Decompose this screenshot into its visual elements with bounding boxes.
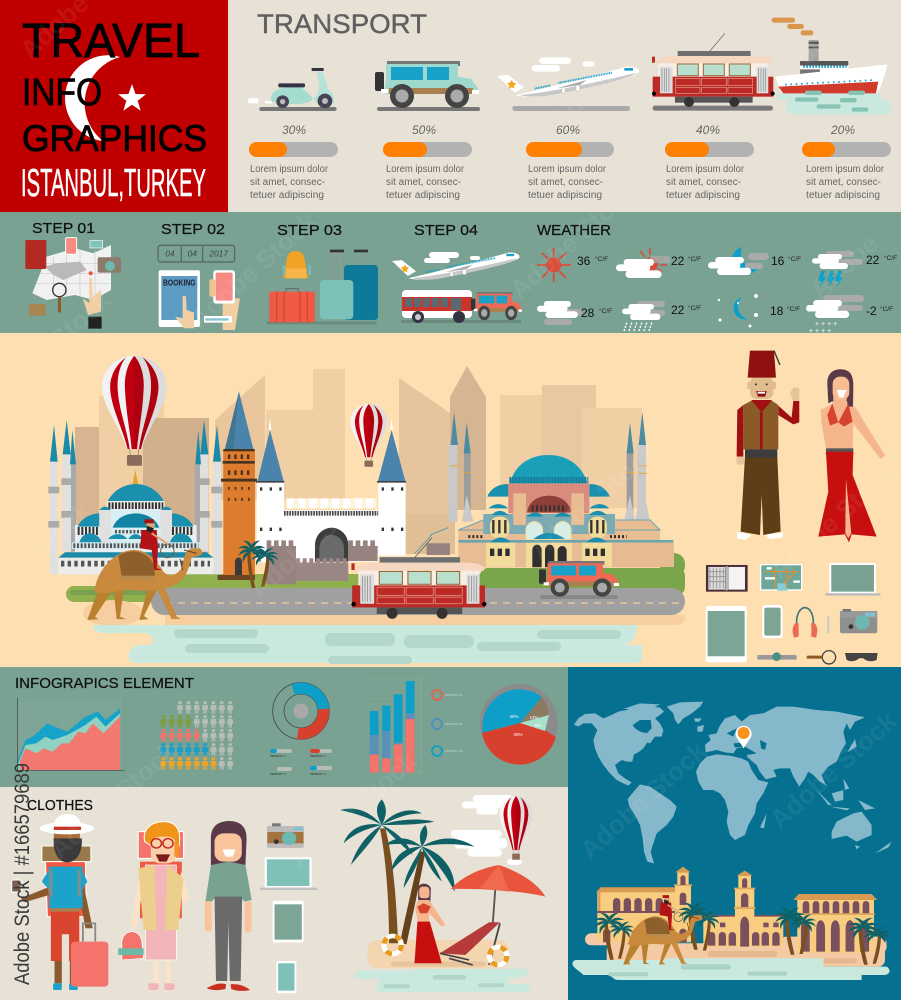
icon: ship	[772, 18, 892, 114]
icon: step 3 luggage	[267, 250, 378, 324]
icon: pen	[827, 616, 829, 633]
icon: snow cloud -2: + + + +	[809, 328, 831, 335]
icon: jeep	[375, 61, 480, 111]
lorem captions: Lorem ipsum dolor	[250, 164, 329, 175]
stock watermarks: Adobe	[764, 18, 844, 94]
icon: rain cloud 22: °C/F	[688, 304, 701, 312]
icon: moon cloud 16	[708, 247, 801, 275]
crescent and star	[65, 55, 146, 141]
donut chart	[273, 683, 329, 739]
icon: camera	[840, 609, 877, 633]
lorem captions: sit amet, consec-	[250, 177, 325, 188]
product ring legend: PRODUCT 01	[445, 693, 463, 697]
city silhouette	[75, 366, 642, 557]
figure: bearded traveller	[12, 814, 108, 990]
stock watermarks: Stock	[24, 494, 97, 564]
panel: transport	[248, 9, 892, 201]
pictogram chart	[160, 701, 233, 770]
figure: woman in green top	[205, 821, 252, 991]
panel: infographic elements	[15, 675, 558, 776]
lorem captions: tetuer adipiscing	[806, 190, 880, 201]
icon: sun 36: °C/F	[595, 255, 608, 263]
beach scene	[340, 795, 545, 992]
stat: 60 percent	[526, 123, 614, 157]
icon: snow cloud -2: -2	[866, 304, 877, 318]
lorem captions: sit amet, consec-	[528, 177, 603, 188]
stat: 60 percent: 60%	[556, 123, 580, 137]
icon: tram	[652, 33, 775, 111]
landmark: blue mosque	[48, 420, 222, 574]
lorem captions: tetuer adipiscing	[528, 190, 602, 201]
icon: rain cloud 22: 22	[671, 303, 685, 317]
icon: step 2 booking: 2017	[208, 249, 228, 259]
panel: world map	[568, 667, 901, 1000]
stat: 50 percent	[383, 123, 472, 157]
icon: cloud 28	[537, 301, 612, 325]
pie chart: 40%	[509, 714, 519, 719]
lorem captions: tetuer adipiscing	[250, 190, 324, 201]
icon: rain cloud 22	[622, 301, 701, 331]
stat: 20 percent	[802, 123, 891, 157]
stock watermarks: Adobe Stock	[544, 5, 683, 134]
icon: headphones	[793, 608, 817, 638]
icon: night moon 18: 18	[770, 304, 784, 318]
stat: 30 percent	[249, 123, 338, 157]
stock watermarks: Adobe	[804, 228, 884, 304]
lorem captions: Lorem ipsum dolor	[528, 164, 607, 175]
icon: step 2 booking: 04	[188, 249, 197, 259]
stat: 20 percent: 20%	[830, 123, 855, 137]
lorem captions: Lorem ipsum dolor	[806, 164, 885, 175]
panel: title	[0, 0, 228, 212]
pie chart: 8%	[535, 723, 541, 728]
stock watermarks: Adobe Stock	[284, 745, 423, 874]
icon: step 2 booking	[158, 245, 240, 330]
stat: 40 percent: 40%	[696, 123, 720, 137]
landmark: galata tower	[218, 392, 257, 580]
product ring legend	[432, 690, 463, 756]
road	[83, 588, 685, 626]
icon: scooter	[248, 68, 337, 111]
stock watermarks: Adobe Stock	[764, 705, 901, 834]
title text: INFO	[22, 72, 102, 114]
stock watermarks: Adobe Stock	[44, 735, 183, 864]
icon: storm cloud 22	[812, 251, 897, 287]
progress chart	[249, 123, 891, 157]
sand and water	[572, 933, 890, 980]
map camel with rider	[623, 895, 703, 965]
icon: sun 36	[537, 248, 608, 282]
step headings: STEP 01	[32, 220, 95, 237]
stock watermarks: Adobe Stock	[184, 205, 323, 334]
icon: sun behind cloud 22: 22	[671, 254, 685, 268]
lorem captions: sit amet, consec-	[806, 177, 881, 188]
balloon large	[102, 356, 167, 466]
icon: laptop	[825, 563, 881, 596]
donut legend	[270, 749, 332, 776]
icon: cloud 28: 28	[581, 306, 595, 320]
area chart	[17, 698, 124, 770]
panel: steps	[25, 220, 897, 335]
step headings: STEP 04	[414, 222, 478, 239]
lorem captions: sit amet, consec-	[666, 177, 741, 188]
infographics heading: INFOGRAPICS ELEMENT	[15, 675, 194, 692]
figure: woman with backpack	[118, 822, 189, 990]
icon: moon cloud 16: °C/F	[788, 255, 801, 263]
icon: moon cloud 16: 16	[771, 254, 785, 268]
landmark: hagia sophia	[448, 412, 674, 567]
stock watermarks: Adobe Stock	[524, 435, 663, 564]
location pin	[736, 726, 752, 748]
icon: storm cloud 22: 22	[866, 253, 880, 267]
lorem captions: Lorem ipsum dolor	[386, 164, 465, 175]
camel with rider	[87, 519, 202, 620]
donut legend: PRODUCT 1	[310, 754, 327, 758]
title text: TRAVEL	[22, 15, 200, 68]
icon: night moon 18: °C/F	[787, 305, 800, 313]
jeep on road	[539, 561, 619, 599]
icon: step 2 booking: 04	[165, 249, 175, 259]
panel: people and travel items	[706, 351, 885, 664]
icon: snow cloud -2: °C/F	[880, 305, 893, 313]
donut legend: PRODUCT 1	[270, 772, 287, 776]
stat: 30 percent: 30%	[282, 123, 306, 137]
stock watermarks: Adobe Stock	[244, 475, 383, 604]
icon: tablet	[706, 606, 747, 662]
panel: city scene	[48, 356, 685, 664]
icon: watch	[757, 652, 797, 661]
ground green	[66, 553, 685, 602]
icon: step 4 plane and bus	[392, 252, 520, 280]
lorem captions: Lorem ipsum dolor	[666, 164, 745, 175]
panel: clothes	[12, 795, 545, 993]
step headings: STEP 03	[277, 222, 342, 239]
title text	[22, 15, 207, 159]
donut legend: PRODUCT 1	[270, 754, 287, 758]
subtitle: ISTANBUL,TURKEY	[21, 162, 206, 205]
icon: cloud 28: °C/F	[599, 307, 612, 315]
stock watermarks: Stock	[44, 284, 117, 354]
step headings	[32, 220, 611, 239]
lorem captions	[250, 164, 885, 201]
icon: step 2 booking: BOOKING	[163, 279, 196, 288]
stock id label: Adobe Stock | #166579689	[11, 763, 34, 985]
icon: folded map	[760, 564, 802, 591]
stock watermarks: Adobe Stock	[764, 455, 901, 584]
icon: night moon 18	[718, 294, 800, 328]
icon: snow cloud -2: + + + +	[815, 321, 837, 328]
bar chart	[365, 677, 422, 773]
tram on road	[351, 538, 486, 619]
icon: step 1 map and planning	[25, 238, 121, 329]
icon: plane	[497, 57, 639, 111]
icon: notebook	[706, 565, 748, 592]
icon: bus and jeep	[401, 290, 522, 323]
lorem captions: tetuer adipiscing	[666, 190, 740, 201]
icon: magnifier	[807, 651, 836, 664]
device icons	[260, 823, 317, 993]
stock watermarks: Adobe Stock	[504, 175, 643, 304]
stat: 40 percent	[665, 123, 754, 157]
lorem captions: tetuer adipiscing	[386, 190, 460, 201]
clothes heading: CLOTHES	[27, 797, 93, 814]
product ring legend: PRODUCT 03	[445, 749, 463, 753]
lorem captions: sit amet, consec-	[386, 177, 461, 188]
step headings: STEP 02	[161, 221, 225, 238]
icon: sunglasses	[845, 653, 878, 661]
palace buildings	[596, 867, 877, 953]
icon: sun behind cloud 22: °C/F	[688, 255, 701, 263]
world map continents	[574, 702, 892, 863]
title text: GRAPHICS	[22, 118, 207, 159]
map palms	[594, 900, 891, 965]
product ring legend: PRODUCT 02	[445, 722, 463, 726]
palms near tower	[237, 538, 279, 590]
figure: belly dancer	[818, 369, 885, 542]
icon: storm cloud 22: °C/F	[884, 254, 897, 262]
weather icons	[537, 247, 897, 335]
icon: snow cloud -2	[806, 295, 893, 335]
donut legend: PRODUCT 1	[310, 772, 327, 776]
figure: man in fez	[737, 351, 799, 540]
step headings: WEATHER	[537, 222, 611, 239]
landmark: topkapi gate	[256, 418, 450, 584]
icon: sun behind cloud 22	[616, 248, 701, 278]
balloon small	[350, 404, 387, 467]
icon: phone	[762, 605, 783, 638]
pie chart	[480, 684, 558, 765]
pie chart: 40%	[513, 732, 523, 737]
water	[93, 625, 642, 664]
pie chart: 12%	[529, 715, 539, 720]
icon: sun 36: 36	[577, 254, 591, 268]
transport heading: TRANSPORT	[257, 9, 427, 39]
stock watermarks: Adobe Stock	[574, 735, 713, 864]
stat: 50 percent: 50%	[412, 123, 436, 137]
